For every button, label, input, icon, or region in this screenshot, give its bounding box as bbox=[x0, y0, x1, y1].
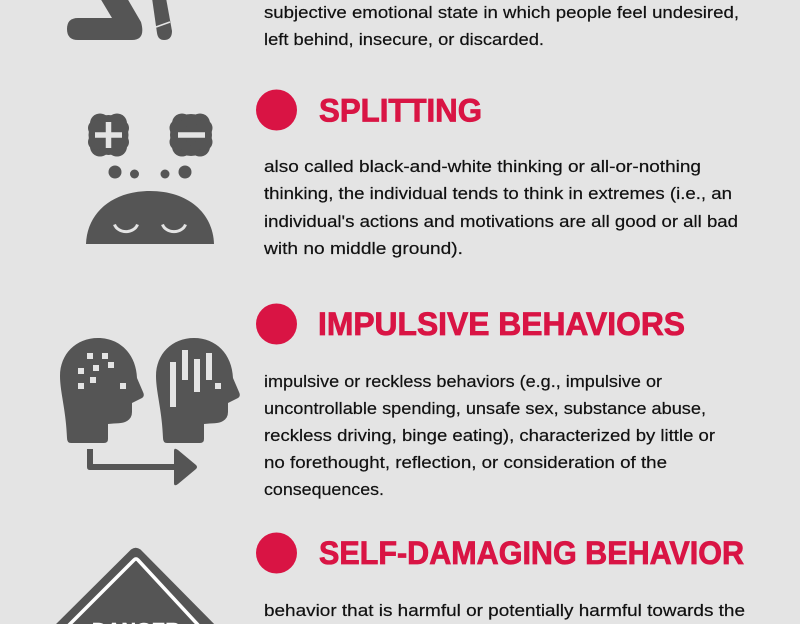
text: impulsive behaviors description: consequences. bbox=[264, 480, 384, 499]
text: impulsive behaviors description: reckless driving, binge eating), characterized by little or bbox=[264, 426, 715, 445]
text: impulsive behaviors description: no forethought, reflection, or consideration of the bbox=[264, 453, 667, 472]
text: rejection description: left behind, insecure, or discarded. bbox=[264, 30, 544, 49]
text: impulsive behaviors description: uncontrollable spending, unsafe sex, substance abuse, bbox=[264, 399, 706, 418]
text: self-damaging behavior description: behavior that is harmful or potentially harmful towards the bbox=[264, 601, 745, 620]
text: impulsive behaviors description: impulsive or reckless behaviors (e.g., impulsive or bbox=[264, 372, 662, 391]
text: splitting description: thinking, the individual tends to think in extremes (i.e., an bbox=[264, 184, 732, 203]
text: splitting description: also called black-and-white thinking or all-or-nothing bbox=[264, 157, 701, 176]
icon: kneeling figure bbox=[67, 0, 172, 40]
icon: two heads with arrow bbox=[60, 338, 240, 485]
heading: self-damaging behavior: SELF-DAMAGING BEHAVIOR bbox=[319, 535, 744, 571]
icon: danger sign bbox=[44, 548, 226, 624]
text: splitting description: individual's actions and motivations are all good or all bad bbox=[264, 212, 738, 231]
bullet: splitting bbox=[256, 90, 297, 130]
heading: splitting: SPLITTING bbox=[319, 92, 482, 128]
icon: positive and negative thoughts over face bbox=[86, 114, 214, 244]
text: rejection description: subjective emotional state in which people feel undesired, bbox=[264, 3, 739, 22]
text: rejection description bbox=[264, 3, 739, 49]
bullet: impulsive behaviors bbox=[256, 304, 297, 344]
text: splitting description bbox=[263, 157, 738, 258]
heading: impulsive behaviors: IMPULSIVE BEHAVIORS bbox=[318, 306, 685, 342]
text: impulsive behaviors description bbox=[264, 372, 715, 499]
bullet: self-damaging behavior bbox=[256, 532, 297, 574]
text: splitting description: with no middle ground). bbox=[263, 239, 463, 258]
